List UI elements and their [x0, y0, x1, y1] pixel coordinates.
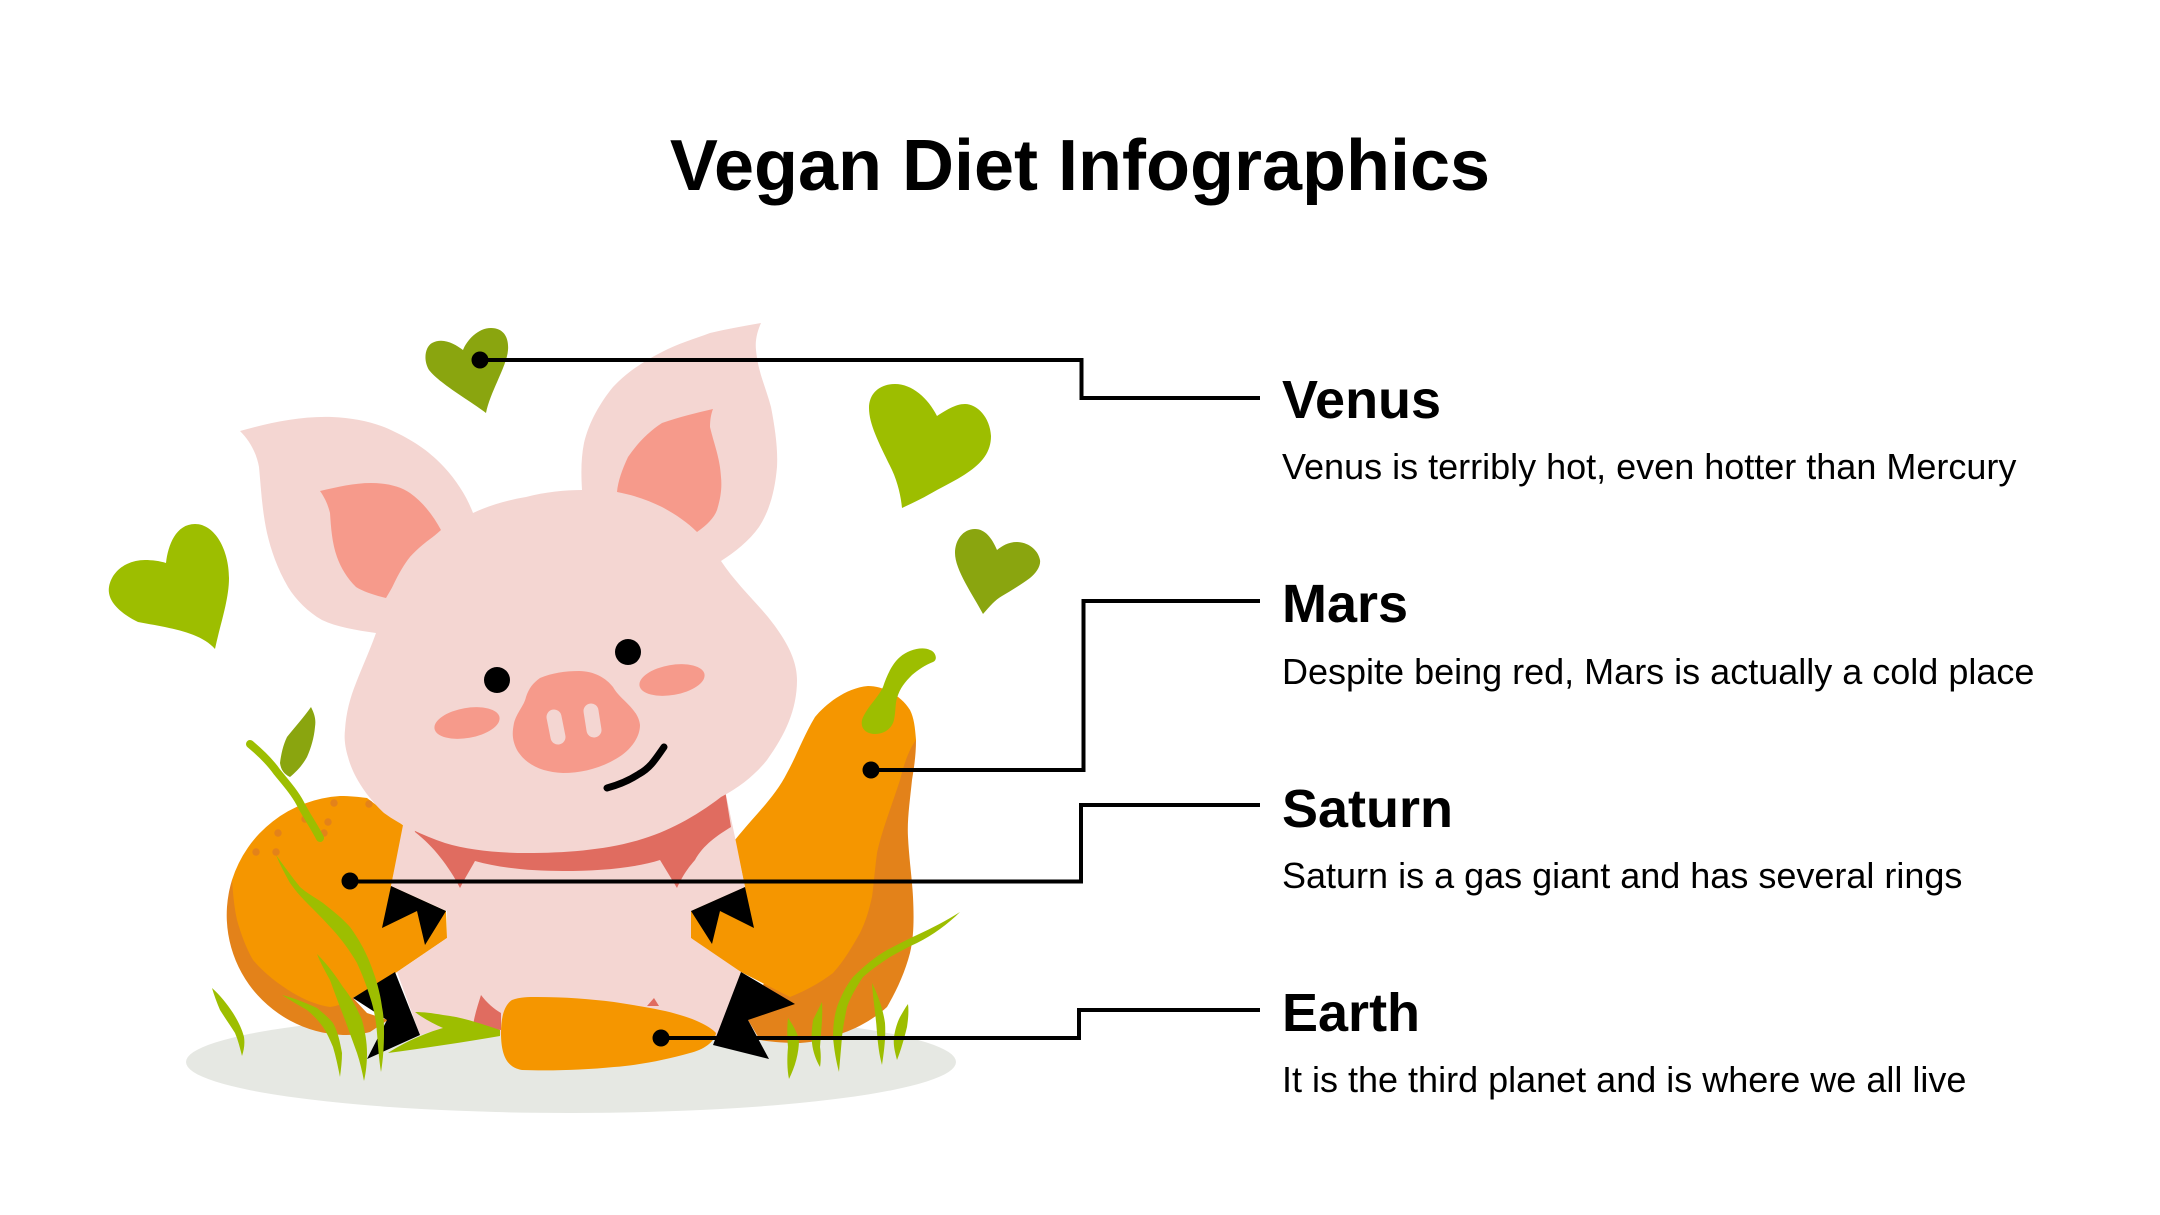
pig right inner ear: [617, 409, 721, 532]
heart: lower right dark green: [955, 529, 1040, 614]
text block: Venus: Venus is terribly hot, even hotter than Mercury: [1282, 446, 2016, 487]
grass left: [212, 855, 384, 1081]
orange stem: [250, 744, 320, 838]
illustration: pig with vegetables: [109, 323, 1040, 1113]
pig head: [345, 490, 797, 853]
pig eyes: [484, 667, 510, 693]
pig right ear: [581, 323, 777, 561]
pig snout: [513, 671, 640, 773]
pig collar: [410, 790, 731, 888]
title: Vegan Diet Infographics: [670, 126, 1490, 206]
text block: Venus: [1282, 370, 2016, 487]
heart: top dark green: [425, 328, 508, 413]
pig nostrils: [554, 711, 594, 737]
heart: upper right green: [869, 384, 991, 508]
pig body: [391, 790, 745, 1040]
pig mouth: [607, 747, 664, 788]
connector: Saturn: [342, 805, 1260, 890]
pear: [691, 686, 916, 1043]
text block: Earth: It is the third planet and is where we all live: [1282, 1059, 1966, 1100]
text block: Saturn: Saturn: [1282, 779, 1453, 839]
orange fruit pores: [252, 799, 373, 856]
connector: Venus: [472, 352, 1260, 398]
grass right: [787, 912, 960, 1079]
pig lower red details: [473, 995, 659, 1030]
carrot leaves: [388, 1012, 500, 1053]
text block: Earth: [1282, 983, 1966, 1100]
ground shadow: [186, 1011, 956, 1113]
connector: Mars: [862, 601, 1260, 778]
text block: Earth: Earth: [1282, 983, 1420, 1043]
text block: Mars: Mars: [1282, 574, 1408, 634]
carrot: [501, 997, 716, 1070]
connector: Earth: [652, 1010, 1260, 1046]
text block: Mars: Despite being red, Mars is actually a cold place: [1282, 651, 2034, 692]
pig left inner ear: [320, 483, 441, 598]
pig cheeks: [432, 702, 502, 744]
pig hooves: [353, 886, 795, 1059]
pear stem and leaf: [862, 648, 936, 734]
orange leaf: [280, 707, 315, 777]
left orange fruit: [227, 796, 447, 1035]
text block: Saturn: [1282, 779, 1962, 896]
heart: left green: [109, 524, 229, 649]
pig left ear: [240, 417, 480, 640]
text block: Mars: [1282, 574, 2034, 692]
text block: Saturn: Saturn is a gas giant and has several rings: [1282, 855, 1962, 896]
text block: Venus: Venus: [1282, 370, 1441, 430]
